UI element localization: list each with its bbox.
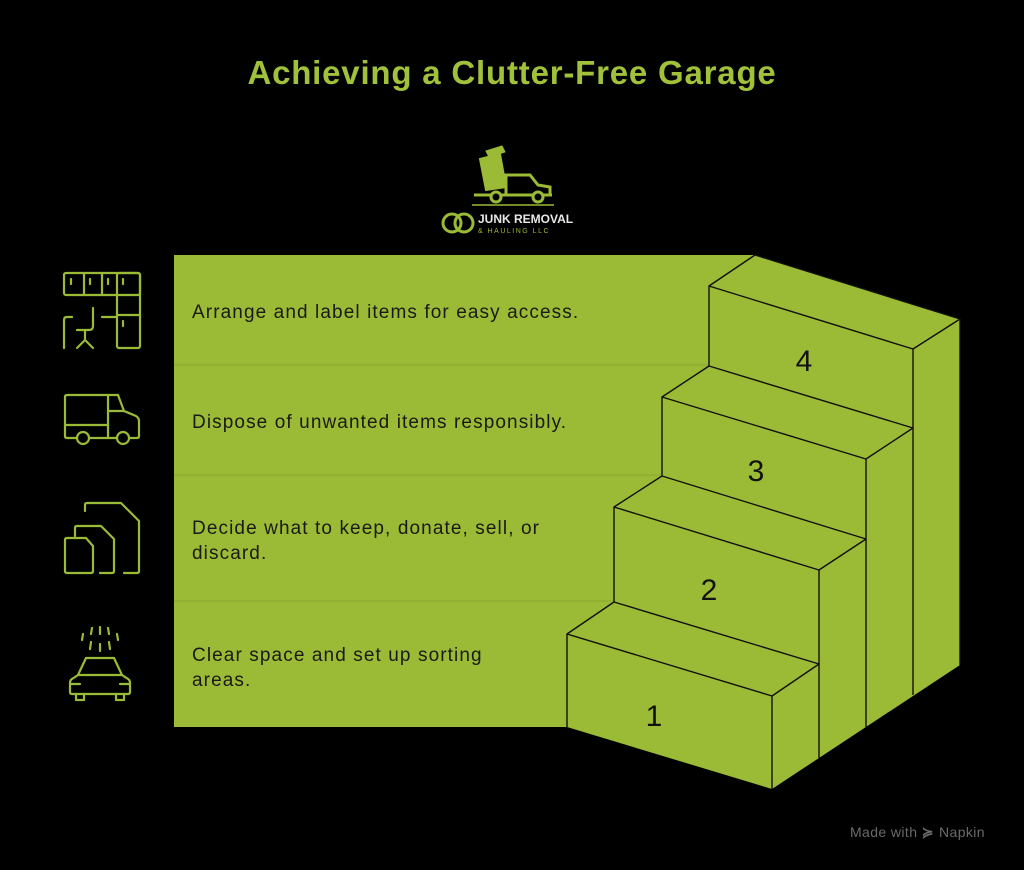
step 1 text: Clear space and set up sorting (192, 645, 483, 666)
icon: truck (64, 394, 140, 446)
step numbers: 4 (796, 345, 812, 378)
logo text (443, 212, 573, 235)
logo text: JUNK REMOVAL (478, 212, 573, 226)
step 1 text: areas. (192, 670, 251, 691)
step numbers: 2 (701, 574, 717, 607)
step 1 text (192, 645, 483, 691)
step 2 text (192, 518, 540, 564)
step numbers: 3 (748, 455, 764, 488)
logo text: & HAULING LLC (478, 228, 550, 235)
icon: files (64, 502, 140, 574)
green panel (174, 255, 960, 789)
step numbers: 1 (646, 700, 662, 733)
logo (442, 145, 573, 235)
icon: car wash (68, 626, 132, 702)
step 2 text: Decide what to keep, donate, sell, or (192, 518, 540, 539)
stair outlines (567, 255, 960, 789)
step numbers (646, 345, 812, 733)
footer: made with napkin: Made with Napkin (850, 824, 985, 840)
title: Achieving a Clutter-Free Garage (247, 54, 777, 91)
step 2 text: discard. (192, 543, 267, 564)
icon: cabinets and desk (62, 272, 142, 350)
step 3 text: Dispose of unwanted items responsibly. (192, 412, 567, 433)
icon: trash can and truck (472, 146, 554, 205)
footer: made with napkin: ≽ (922, 824, 934, 840)
step 4 text: Arrange and label items for easy access. (192, 302, 579, 323)
